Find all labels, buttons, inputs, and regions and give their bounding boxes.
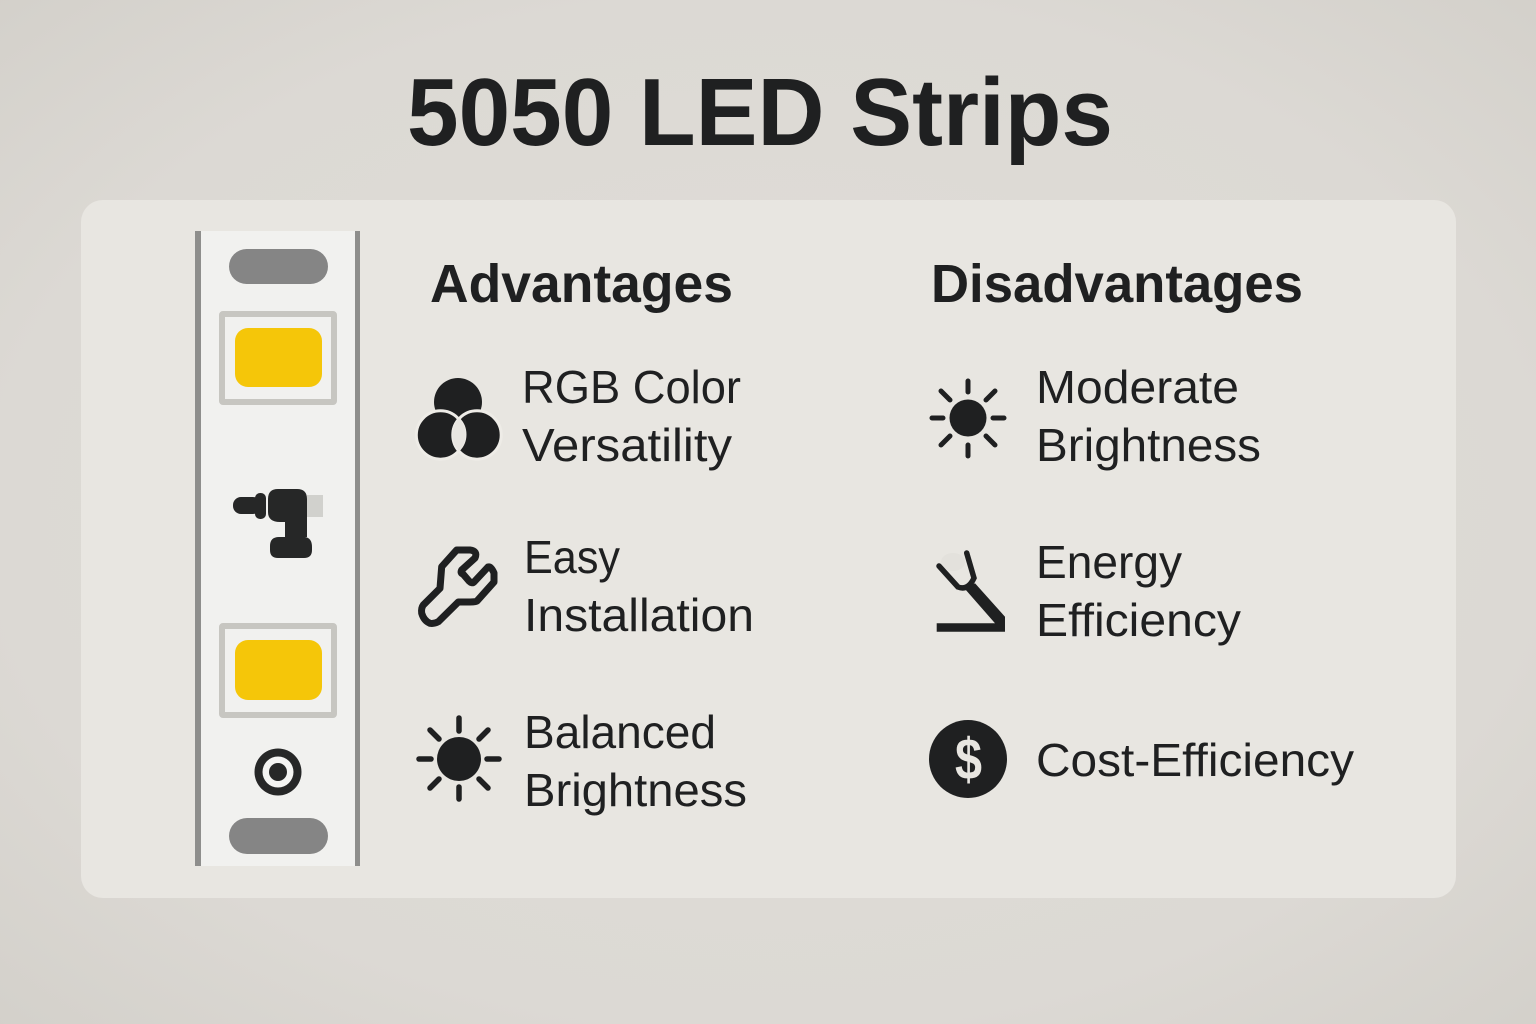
icon: sun (balanced brightness) [419, 718, 499, 799]
icon: energy fork [937, 553, 1005, 632]
text: energy efficiency [1036, 536, 1241, 646]
heading: disadvantages: Disadvantages [931, 254, 1303, 314]
icon: dollar coin [929, 720, 1007, 798]
text: RGB color versatility: Versatility [522, 419, 732, 471]
text: balanced brightness: Balanced [524, 706, 716, 758]
icon: dollar coin: $ [955, 727, 982, 792]
heading: advantages: Advantages [430, 254, 733, 314]
icon: wrench [422, 550, 494, 623]
text: RGB color versatility: RGB Color [522, 361, 741, 413]
text: moderate brightness: Brightness [1036, 419, 1261, 471]
text: energy efficiency: Energy [1036, 536, 1182, 588]
LED strip illustration [195, 231, 360, 866]
target mounting hole [254, 748, 302, 796]
LED chip 2 [222, 626, 334, 715]
text: balanced brightness: Brightness [524, 764, 747, 816]
text: easy installation: Easy [524, 531, 620, 583]
text: moderate brightness [1036, 361, 1261, 471]
icon: RGB circles [416, 378, 501, 459]
text: RGB color versatility [522, 361, 741, 471]
text: easy installation [524, 531, 754, 641]
connector component [233, 489, 323, 558]
text: balanced brightness [524, 706, 747, 816]
text: energy efficiency: Efficiency [1036, 594, 1241, 646]
panel: main card [81, 200, 1456, 898]
title: 5050 LED Strips [407, 59, 1113, 166]
top solder pad [229, 249, 328, 284]
text: cost-efficiency: Cost-Efficiency [1036, 734, 1354, 786]
LED chip 1 [222, 314, 334, 402]
icon: sun (moderate brightness) [932, 381, 1004, 456]
bottom solder pad [229, 818, 328, 854]
text: easy installation: Installation [524, 589, 754, 641]
text: moderate brightness: Moderate [1036, 361, 1239, 413]
